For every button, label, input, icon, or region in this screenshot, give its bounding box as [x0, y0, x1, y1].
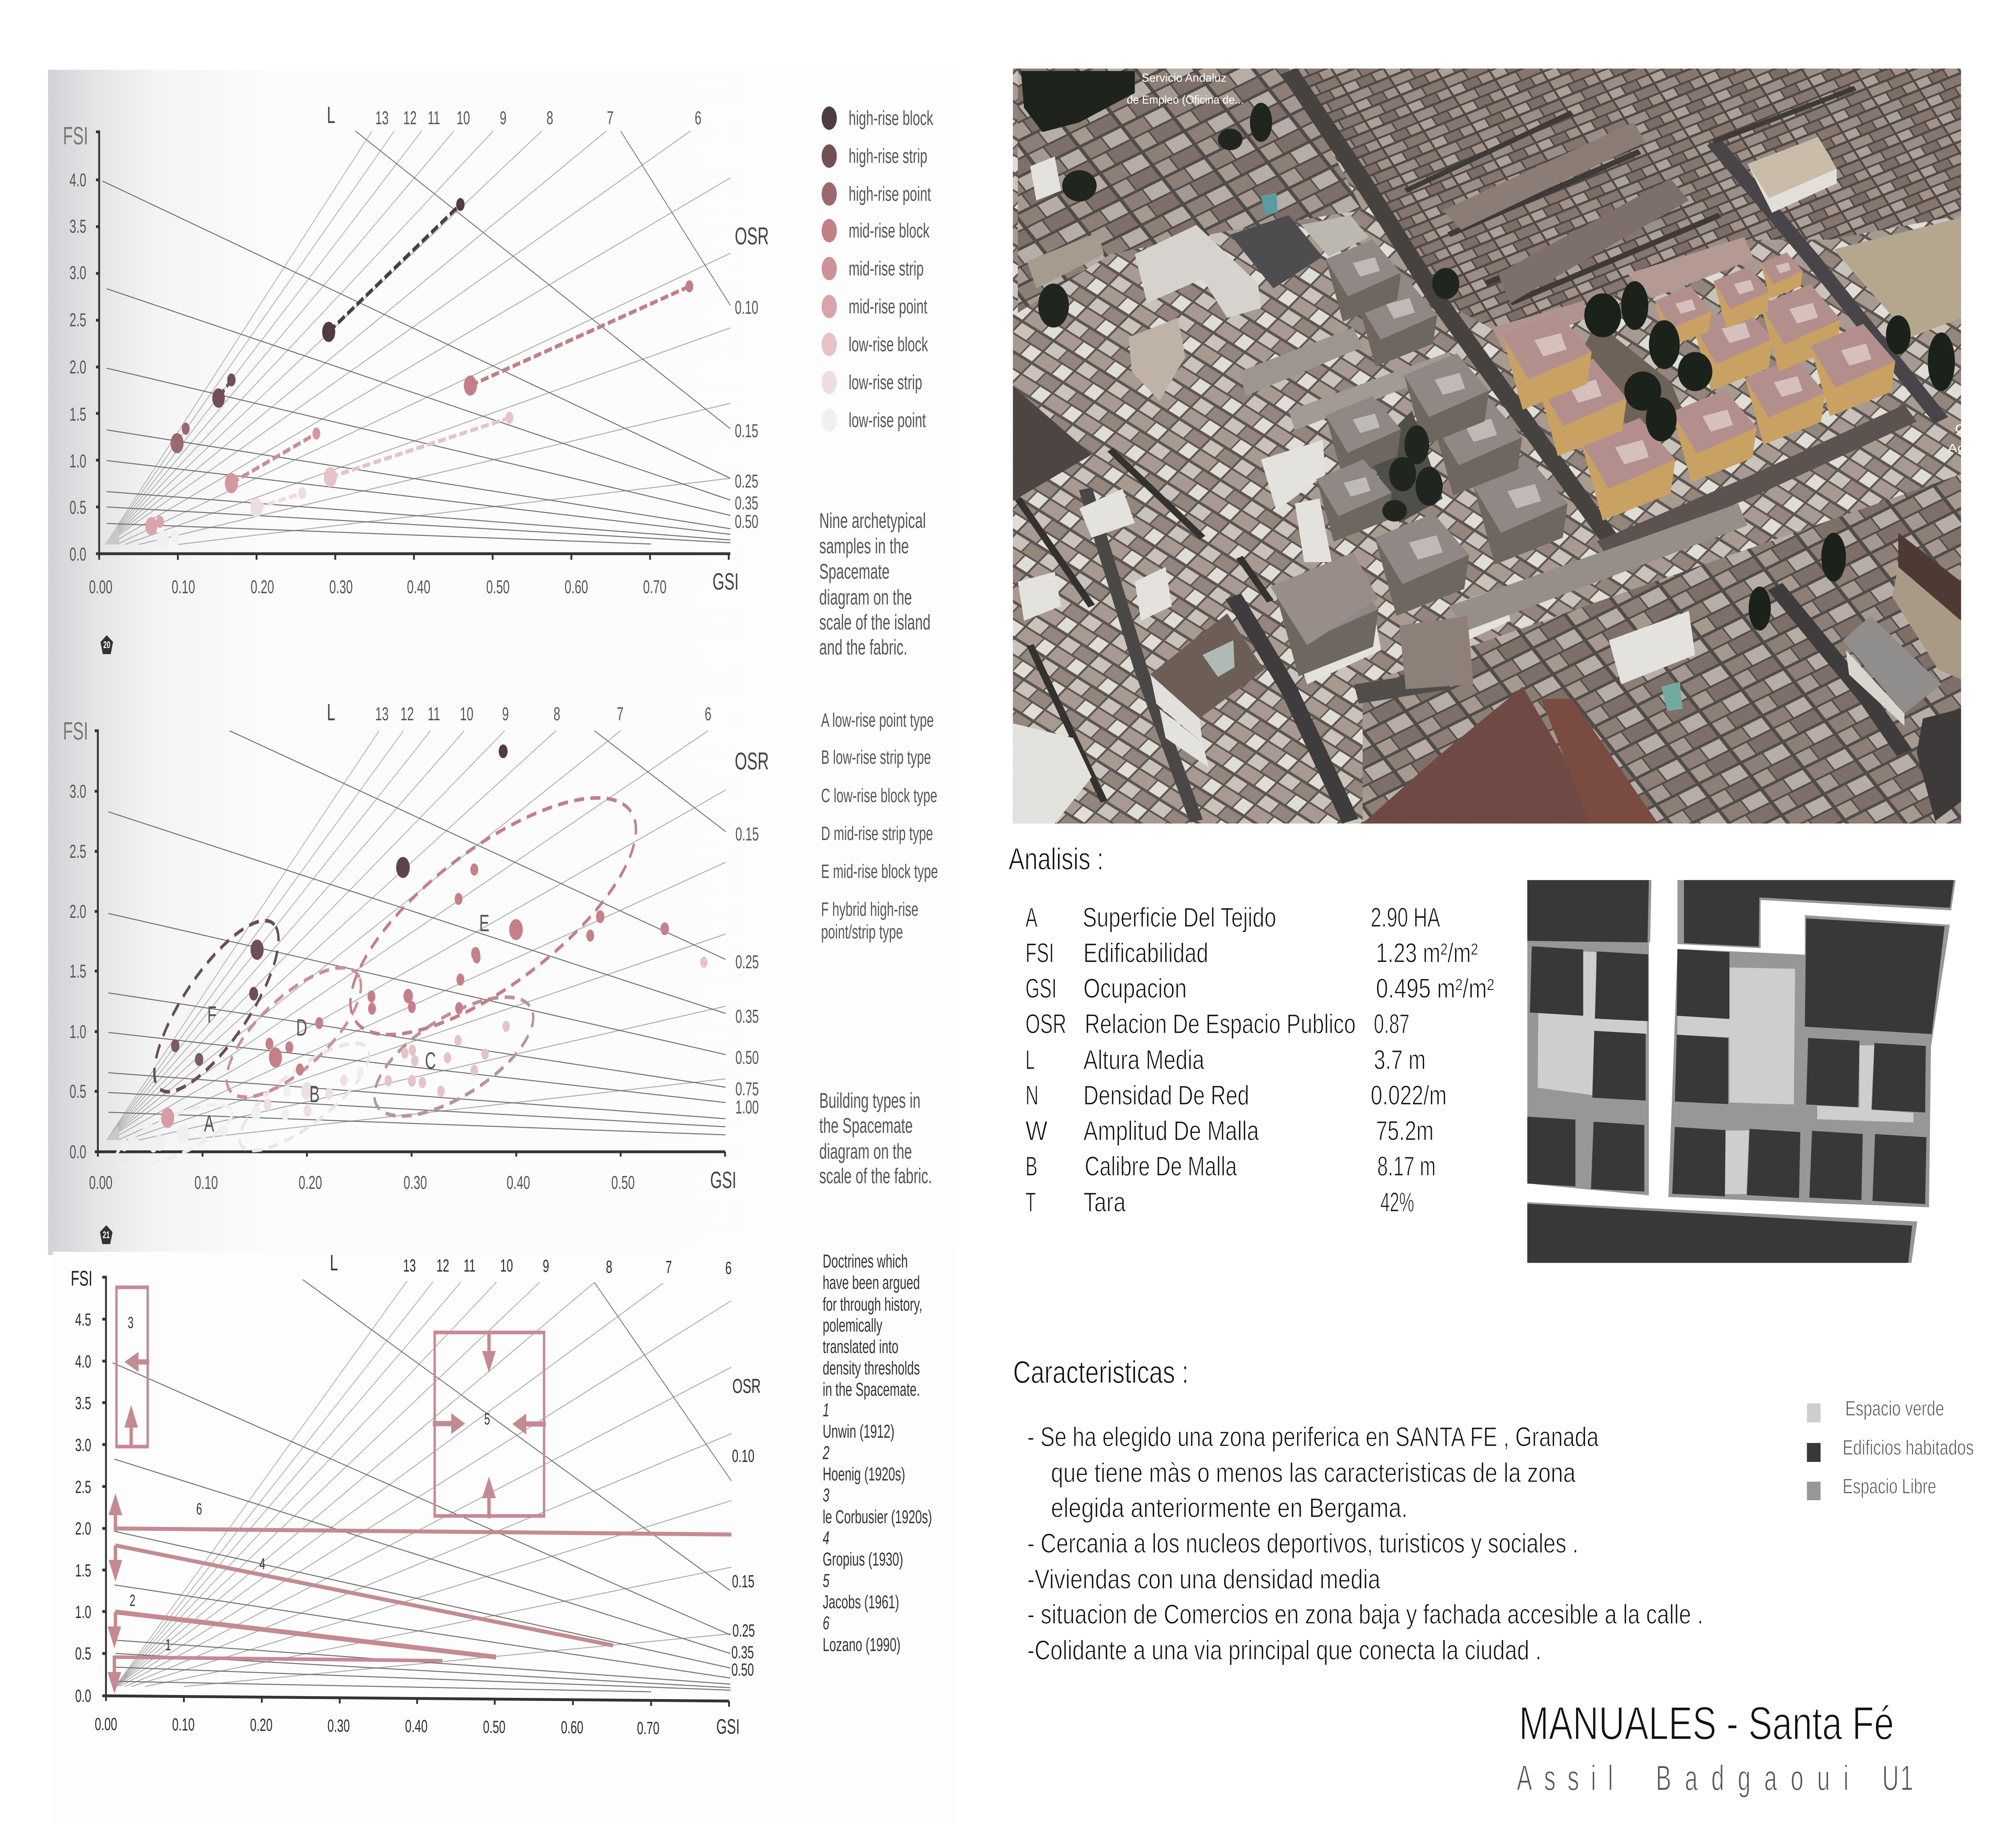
text block: doctrines — [823, 1251, 932, 1655]
text block: doctrines: 6 — [823, 1613, 829, 1634]
chart 2 labels: 0.10 — [194, 1173, 218, 1193]
chart 3 labels: 0.0 — [75, 1686, 91, 1705]
chart 2 labels: 0.50 — [611, 1173, 635, 1193]
chart 2 labels: FSI — [63, 717, 88, 745]
chart 3 labels: 0.20 — [250, 1715, 273, 1735]
icon: page number 20 — [100, 635, 113, 654]
table: analysis indicators: 0.022/m — [1370, 1080, 1447, 1111]
chart 1 labels: FSI — [63, 122, 88, 150]
chart 3 labels: 9 — [543, 1256, 549, 1276]
text block: doctrines: 5 — [823, 1571, 829, 1591]
text block: characteristics — [1027, 1422, 1703, 1666]
chart 1 labels: 2.5 — [69, 310, 86, 331]
icon: page number 20: 20 — [103, 640, 110, 651]
chart 3 labels: FSI — [71, 1267, 92, 1291]
chart 3 labels: 2 — [129, 1591, 135, 1610]
table: analysis indicators: OSR — [1025, 1009, 1066, 1039]
chart 2 labels: 6 — [705, 704, 711, 725]
axes and ticks — [102, 1277, 729, 1707]
chart 2 labels: 12 — [400, 704, 414, 725]
legend: nine archetypes: mid-rise block — [849, 219, 930, 242]
chart 3 labels: 1.0 — [75, 1602, 91, 1622]
chart 3 labels: 1 — [165, 1636, 171, 1654]
chart 1 labels: 6 — [695, 108, 702, 129]
chart 3 labels: 8 — [606, 1257, 612, 1276]
text block: doctrines: Lozano (1990) — [823, 1635, 900, 1655]
chart 1 labels: 0.15 — [735, 421, 758, 442]
chart 1 labels: GSI — [712, 569, 739, 595]
text block: building types — [819, 1089, 932, 1188]
text block: characteristics: que tiene màs o menos las caracteristicas de la zona — [1051, 1458, 1576, 1488]
text block: doctrines: density thresholds — [823, 1358, 920, 1379]
legend: nine archetypes: high-rise strip — [849, 145, 927, 167]
chart 1 labels: 11 — [428, 108, 440, 129]
text block: characteristics: -Viviendas con una densidad media — [1027, 1564, 1381, 1595]
map labels: Servicio Andaluz — [1141, 71, 1227, 85]
scanned page background — [48, 70, 956, 1255]
chart 1 labels: 1.5 — [69, 404, 86, 425]
chart 3 labels: 2.5 — [75, 1477, 91, 1497]
chart 3 labels: 6 — [725, 1258, 732, 1278]
chart 1 labels: 0.50 — [486, 577, 510, 598]
text block: doctrines: 2 — [823, 1443, 829, 1464]
chart 2 labels: 0.5 — [69, 1082, 86, 1102]
legend: site plan: Espacio verde — [1845, 1397, 1944, 1420]
text block: building types: Building types in — [819, 1089, 921, 1113]
chart 3 labels: 0.50 — [483, 1717, 506, 1737]
text block: characteristics: elegida anteriormente en Bergama. — [1051, 1493, 1408, 1523]
chart 2 labels: L — [327, 700, 335, 726]
legend: nine archetypes: high-rise point — [849, 183, 931, 205]
chart 1 labels: 13 — [375, 108, 389, 129]
chart 3 labels: 11 — [464, 1255, 475, 1275]
text block: doctrines: have been argued — [823, 1273, 920, 1293]
chart 2 labels: E — [479, 911, 489, 936]
chart 2 labels: 9 — [502, 704, 509, 725]
chart 3 labels: 0.25 — [733, 1620, 755, 1640]
chart 2 labels: 1.0 — [69, 1022, 86, 1042]
axes and ticks — [96, 132, 730, 560]
author line: U1 — [1882, 1758, 1913, 1798]
red roof bottom — [1363, 687, 1591, 824]
chart 2 labels: 8 — [554, 704, 560, 725]
chart 3 labels: 3.5 — [75, 1393, 91, 1413]
icon: page number 21 — [100, 1225, 112, 1244]
table: analysis indicators: GSI — [1025, 974, 1057, 1004]
chart 3 labels: 3 — [128, 1314, 133, 1332]
legend: building types — [821, 709, 938, 943]
chart 2 labels: 0.00 — [89, 1173, 112, 1193]
chart 1 labels: 7 — [607, 108, 614, 129]
chart 1 labels — [63, 102, 769, 598]
aerial photo of Santa Fe: Ag — [1947, 442, 1966, 455]
text block: nine archetypical samples: samples in the — [819, 535, 909, 558]
chart 3 labels: 0.30 — [327, 1716, 350, 1735]
chart 3 labels: GSI — [716, 1715, 740, 1739]
author line: Badgaoui — [1656, 1758, 1849, 1798]
doctrine 5 box and arrows — [433, 1331, 546, 1518]
chart 1 labels: L — [327, 102, 335, 128]
legend: nine archetypes: high-rise block — [849, 107, 933, 129]
chart 3 labels: 4.0 — [75, 1351, 91, 1371]
axes and ticks — [95, 731, 725, 1157]
chart 3 labels: 0.5 — [75, 1643, 91, 1663]
text block: doctrines: polemically — [823, 1316, 883, 1336]
chart 1 labels: 0.00 — [89, 577, 112, 598]
table: analysis indicators — [1025, 903, 1494, 1218]
chart 3 labels: 5 — [484, 1410, 490, 1428]
chart 1 labels: 0.0 — [69, 544, 86, 565]
chart 2 labels: OSR — [735, 747, 769, 775]
inhabited buildings — [1527, 880, 1954, 1263]
chart 2 labels: 0.30 — [404, 1173, 427, 1193]
heading: Analisis: Analisis : — [1009, 842, 1104, 876]
chart 2 labels: 2.5 — [69, 842, 86, 862]
table: analysis indicators: Ocupacion — [1083, 974, 1187, 1004]
table: analysis indicators: A — [1025, 903, 1038, 933]
text block: building types: the Spacemate — [819, 1114, 913, 1138]
table: analysis indicators: Densidad De Red — [1083, 1080, 1249, 1111]
courtyard trees — [1584, 281, 1955, 630]
chart 2: building types spacemate — [63, 700, 769, 1193]
legend: nine archetypes: low-rise point — [849, 409, 926, 432]
table: analysis indicators: Amplitud De Malla — [1083, 1116, 1259, 1146]
chart 3 labels: 0.60 — [561, 1717, 583, 1737]
aerial photo of Santa Fe — [1013, 69, 1966, 824]
table: analysis indicators: Calibre De Malla — [1085, 1151, 1237, 1182]
legend: nine archetypes — [822, 106, 933, 432]
text block: characteristics: - situacion de Comercios en zona baja y fachada accesible a la calle . — [1027, 1599, 1703, 1630]
table: analysis indicators: Relacion De Espacio Publico — [1085, 1009, 1356, 1039]
chart 1 labels: 4.0 — [69, 170, 86, 191]
table: analysis indicators: Superficie Del Tejido — [1083, 903, 1276, 933]
legend: building types: C low-rise block type — [821, 784, 937, 807]
chart 3 labels: 13 — [403, 1255, 416, 1275]
legend: site plan: Espacio Libre — [1843, 1475, 1936, 1498]
chart 2 labels: B — [310, 1082, 320, 1107]
chart 3 labels: 3.0 — [75, 1435, 91, 1455]
roads — [1018, 71, 1941, 821]
chart 1 labels: 0.5 — [69, 498, 86, 518]
text block: nine archetypical samples: and the fabric. — [819, 636, 907, 659]
row buildings — [1492, 301, 1587, 352]
chart 2 labels: 1.5 — [69, 961, 86, 982]
chart 3 labels: 2.0 — [75, 1518, 91, 1538]
chart 2 labels: D — [296, 1015, 307, 1041]
chart 3 labels: L — [330, 1250, 338, 1276]
text block: characteristics: - Se ha elegido una zona periferica en SANTA FE , Granada — [1027, 1422, 1599, 1452]
table: analysis indicators: 1.23 m²/m² — [1376, 938, 1478, 968]
legend: site plan: Edificios habitados — [1843, 1436, 1974, 1459]
text block: doctrines: 1 — [823, 1400, 829, 1421]
chart 3 labels: 1.5 — [75, 1560, 91, 1580]
chart 1 labels: 0.30 — [329, 577, 353, 598]
dashed sample connectors — [219, 204, 689, 508]
chart 1 labels: 0.10 — [735, 298, 758, 318]
table: analysis indicators: L — [1025, 1045, 1035, 1075]
text block: doctrines: 3 — [823, 1485, 829, 1506]
text block: building types: diagram on the — [819, 1140, 912, 1163]
dark trees top left — [1021, 71, 1135, 132]
chart 3 labels: 4 — [259, 1555, 265, 1573]
aerial photo of Santa Fe: C — [1955, 422, 1966, 436]
chart 1 labels: 0.10 — [172, 577, 195, 598]
chart 2 labels: 10 — [460, 704, 473, 725]
chart 1 labels: 1.0 — [69, 451, 86, 472]
chart 1 labels: 0.25 — [735, 471, 758, 492]
text block: nine archetypical samples: scale of the island — [819, 611, 931, 634]
text block: doctrines: Doctrines which — [823, 1251, 908, 1272]
text block: doctrines: translated into — [823, 1337, 898, 1357]
legend: building types: D mid-rise strip type — [821, 822, 933, 844]
third scan background — [53, 1252, 956, 1824]
chart 3 labels: 0.10 — [172, 1714, 195, 1734]
bright low-rise patches lower left — [1013, 156, 1695, 824]
legend: building types: B low-rise strip type — [821, 746, 931, 768]
doctrine 3 box and arrows — [117, 1287, 149, 1447]
text block: doctrines: Gropius (1930) — [823, 1549, 903, 1570]
text block: doctrines: 4 — [823, 1528, 829, 1549]
table: analysis indicators: N — [1025, 1080, 1039, 1111]
table: analysis indicators: 3.7 m — [1374, 1045, 1426, 1075]
chart 2 labels — [63, 700, 769, 1193]
author line — [1517, 1758, 1913, 1798]
chart 2 labels: C — [425, 1048, 436, 1074]
chart 2 labels: 0.25 — [735, 952, 759, 973]
chart 3 labels: OSR — [732, 1375, 761, 1397]
chart 3 labels: 0.50 — [731, 1660, 754, 1679]
text block: nine archetypical samples: Nine archetypical — [819, 509, 926, 533]
legend: building types: point/strip type — [821, 921, 903, 943]
table: analysis indicators: W — [1025, 1116, 1048, 1146]
chart 3 labels: 0.00 — [95, 1714, 117, 1734]
author line: Assil — [1517, 1758, 1613, 1798]
chart 2 labels: 0.35 — [735, 1007, 759, 1027]
text block: doctrines: in the Spacemate. — [823, 1380, 920, 1400]
text block: nine archetypical samples: Spacemate — [819, 560, 889, 584]
doctrine lines 6, 4, 2, 1 and arrows — [108, 1493, 731, 1694]
chart 2 labels: 0.20 — [299, 1173, 322, 1193]
chart 2 labels: 0.0 — [69, 1142, 86, 1163]
chart 1 labels: 0.50 — [735, 512, 758, 532]
chart 2 labels: 0.50 — [735, 1048, 759, 1068]
sample dots — [145, 198, 694, 548]
chart 3 labels: 0.40 — [405, 1716, 427, 1736]
table: analysis indicators: Altura Media — [1083, 1045, 1204, 1075]
free space — [1527, 880, 1956, 1263]
legend: nine archetypes: low-rise strip — [849, 371, 922, 394]
text block: characteristics: - Cercania a los nucleos deportivos, turisticos y sociales . — [1027, 1528, 1579, 1559]
table: analysis indicators: Tara — [1083, 1187, 1126, 1218]
table: analysis indicators: 2.90 HA — [1370, 903, 1441, 933]
chart 3 labels: 0.70 — [637, 1718, 660, 1738]
lower-right building — [1843, 616, 1941, 713]
type ellipses — [112, 751, 654, 1179]
dark trees — [1038, 103, 1459, 521]
green space — [1538, 951, 1914, 1194]
legend: building types: F hybrid high-rise — [821, 898, 918, 920]
chart 2 labels: 11 — [428, 704, 440, 725]
table: analysis indicators: T — [1025, 1187, 1036, 1218]
legend: nine archetypes: mid-rise strip — [849, 257, 924, 280]
chart 1 labels: 0.35 — [735, 493, 758, 514]
chart 2 labels: 13 — [375, 704, 389, 725]
table: analysis indicators: 0.495 m²/m² — [1376, 974, 1494, 1004]
dark roof left — [1013, 386, 1092, 501]
gray courtyard ground — [1369, 411, 1443, 523]
chart 2 labels: 2.0 — [69, 902, 86, 922]
text block: doctrines: Hoenig (1920s) — [823, 1464, 905, 1485]
site plan figure-ground — [1527, 880, 1956, 1263]
legend: building types: E mid-rise block type — [821, 860, 938, 882]
chart 1: archetypes spacemate — [63, 102, 769, 598]
chart 1 labels: 0.20 — [250, 577, 274, 598]
table: analysis indicators: Edificabilidad — [1083, 938, 1208, 968]
chart 1 labels: 10 — [456, 108, 470, 129]
large dark roof — [1230, 215, 1322, 288]
chart 1 labels: 0.40 — [407, 577, 431, 598]
chart 3 labels: 0.10 — [732, 1446, 754, 1466]
chart 2 labels: 0.40 — [507, 1173, 530, 1193]
table: analysis indicators: FSI — [1025, 938, 1054, 968]
text block: nine archetypical samples: diagram on the — [819, 586, 912, 609]
title: MANUALES - Santa Fé — [1519, 1697, 1894, 1749]
chart 1 labels: 3.0 — [69, 263, 86, 284]
legend: site plan — [1807, 1397, 1974, 1500]
chart 2 labels: 3.0 — [69, 782, 86, 802]
aerial photo of Santa Fe: de Empleo (Oficina de... — [1127, 94, 1244, 106]
courtyard ground — [1578, 323, 1683, 435]
table: analysis indicators: B — [1025, 1151, 1037, 1182]
chart 1 labels: OSR — [735, 222, 769, 250]
table: analysis indicators: 0.87 — [1374, 1009, 1410, 1039]
chart 3 labels — [71, 1250, 761, 1739]
text block: nine archetypical samples — [819, 509, 931, 659]
chart 2 labels: 1.00 — [735, 1097, 759, 1118]
text block: building types: scale of the fabric. — [819, 1165, 932, 1188]
chart 2 labels: 7 — [617, 704, 623, 725]
chart 1 labels: 9 — [500, 108, 506, 129]
white buildings — [1135, 225, 1261, 318]
table: analysis indicators: 42% — [1381, 1187, 1414, 1218]
chart 3 labels: 0.35 — [731, 1642, 754, 1662]
chart 1 labels: 8 — [546, 108, 553, 129]
chart 3 labels: 4.5 — [75, 1309, 91, 1329]
type dots — [121, 744, 708, 1153]
pink apartment blocks — [1581, 418, 1675, 521]
chart 2 labels: GSI — [710, 1168, 736, 1193]
chart 1 labels: 3.5 — [69, 217, 86, 237]
courtyard building lower left — [1150, 613, 1264, 719]
chart 3: doctrines spacemate — [71, 1250, 761, 1739]
chart 3 labels: 10 — [500, 1255, 513, 1275]
chart 2 labels: 0.75 — [735, 1079, 759, 1100]
text block: doctrines: Unwin (1912) — [823, 1422, 894, 1442]
text block: characteristics: -Colidante a una via principal que conecta la ciudad . — [1027, 1635, 1541, 1666]
chart 2 labels: A — [204, 1111, 214, 1137]
chart 3 labels: 6 — [196, 1500, 202, 1518]
text block: doctrines: Jacobs (1961) — [823, 1592, 899, 1613]
text block: doctrines: le Corbusier (1920s) — [823, 1507, 932, 1528]
chart 1 labels: 2.0 — [69, 357, 86, 378]
text block: doctrines: for through history, — [823, 1295, 923, 1315]
legend: nine archetypes: low-rise block — [849, 333, 928, 356]
chart 1 labels: 0.70 — [643, 577, 666, 598]
table: analysis indicators: 8.17 m — [1377, 1151, 1436, 1182]
table: analysis indicators: 75.2m — [1376, 1116, 1434, 1146]
legend: nine archetypes: mid-rise point — [849, 295, 927, 318]
chart 3 labels: 0.15 — [732, 1571, 754, 1591]
chart 2 labels: F — [207, 1002, 217, 1028]
chart 3 labels: 12 — [436, 1255, 449, 1275]
chart 1 labels: 12 — [403, 108, 417, 129]
gray apartment blocks — [1473, 462, 1568, 565]
field — [1834, 218, 1961, 337]
heading: Caracteristicas: Caracteristicas : — [1013, 1354, 1189, 1390]
chart 3 labels: 7 — [665, 1257, 672, 1277]
icon: page number 21: 21 — [103, 1230, 110, 1241]
legend: building types: A low-rise point type — [821, 709, 934, 731]
chart 2 labels: 0.15 — [735, 824, 759, 845]
chart 1 labels: 0.60 — [564, 577, 588, 598]
